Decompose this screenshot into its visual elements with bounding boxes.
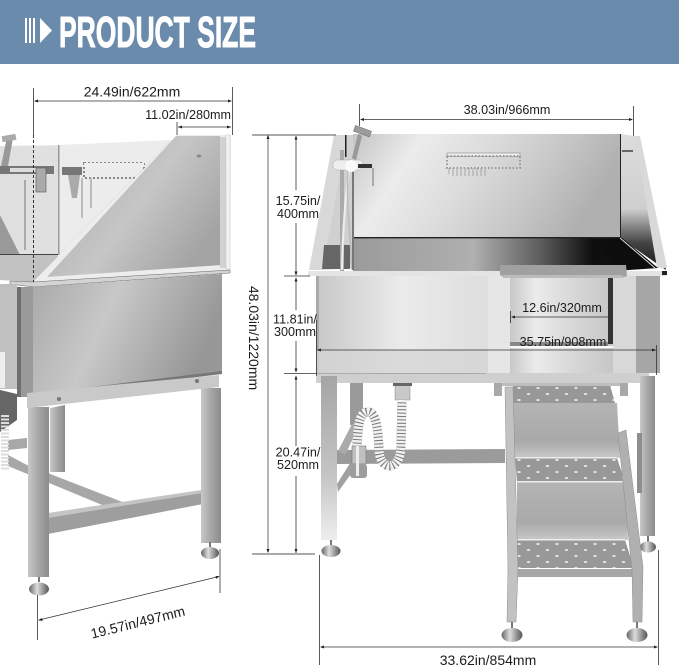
foot step left: [502, 622, 522, 642]
foot front left: [322, 540, 340, 557]
right side panel: [620, 134, 666, 270]
dimension: 38.03in/966mm: 38.03in/966mm: [464, 103, 550, 117]
left view: stand frame: [5, 375, 221, 596]
dimension: 48.03in/1220mm: [246, 135, 336, 554]
front lip: [517, 569, 634, 577]
dimension: 33.62in/854mm: 33.62in/854mm: [440, 652, 536, 668]
foot left: [29, 577, 49, 596]
pull-out stairs: [494, 383, 648, 642]
dimension: 15.75in/400mm: 400mm: [277, 207, 319, 221]
basin: [353, 238, 620, 271]
right rail and leg: [618, 430, 643, 622]
dimension: 24.49in/622mm: 24.49in/622mm: [84, 84, 180, 100]
foot step right: [626, 622, 648, 642]
dimension: 15.75in/400mm: [276, 136, 321, 276]
triangular side panel: [33, 135, 231, 282]
interior wall: [0, 140, 177, 255]
dimension: 20.47in/520mm: 20.47in/: [276, 446, 321, 460]
rim: [10, 270, 230, 287]
tub body: [33, 274, 222, 395]
dimension: 12.6in/320mm: 12.6in/320mm: [522, 301, 602, 315]
faucet: [333, 125, 374, 272]
dimension: 35.75in/908mm: 35.75in/908mm: [520, 335, 606, 349]
left view: side of tub: [0, 134, 231, 432]
dimension: 20.47in/520mm: [276, 376, 321, 553]
right view: stand and drain: [321, 376, 656, 557]
back wall: [353, 134, 620, 238]
dimension: 24.49in/622mm: [34, 84, 232, 282]
top tread: [513, 385, 615, 403]
foot right: [201, 542, 219, 559]
dimension: 38.03in/966mm: [360, 103, 634, 136]
dimension: 12.6in/320mm: [510, 301, 608, 323]
left side panel: [309, 135, 347, 270]
right view: tub: [308, 125, 667, 383]
dimension: 48.03in/1220mm: 48.03in/1220mm: [246, 286, 262, 390]
step lip: [500, 265, 627, 278]
dimension: 11.81in/300mm: 11.81in/: [273, 312, 317, 326]
dimension: 19.57in/497mm: [38, 549, 220, 642]
icon: arrow bars: [25, 18, 52, 43]
dimension: 11.02in/280mm: 11.02in/280mm: [145, 108, 231, 122]
faucet and basket reflection: [0, 134, 144, 250]
dimension: 11.81in/300mm: [273, 278, 317, 374]
tread 3: [517, 540, 634, 568]
left rail and leg: [505, 387, 518, 622]
rim: [308, 271, 666, 276]
front body: [316, 276, 660, 373]
tread 2: [515, 458, 625, 482]
riser 2: [517, 482, 628, 540]
dimension: 20.47in/520mm: 520mm: [277, 458, 319, 472]
header banner: [0, 0, 679, 64]
dimension: 11.81in/300mm: 300mm: [274, 325, 316, 339]
basket: [447, 153, 520, 176]
door opening: [488, 276, 510, 373]
dimension: 33.62in/854mm: [320, 550, 658, 668]
foot back right: [640, 536, 656, 552]
dimension: 15.75in/400mm: 15.75in/: [276, 194, 321, 208]
drain hose fragment: [1, 415, 9, 470]
title: PRODUCT SIZE: [59, 8, 256, 57]
dimension: 11.02in/280mm: [145, 108, 231, 135]
drain pipe: [350, 383, 412, 478]
dimension: 19.57in/497mm: 19.57in/497mm: [89, 603, 187, 642]
riser 1: [513, 403, 620, 458]
dimension: 35.75in/908mm: [316, 320, 656, 376]
bottom frame: [316, 373, 649, 383]
